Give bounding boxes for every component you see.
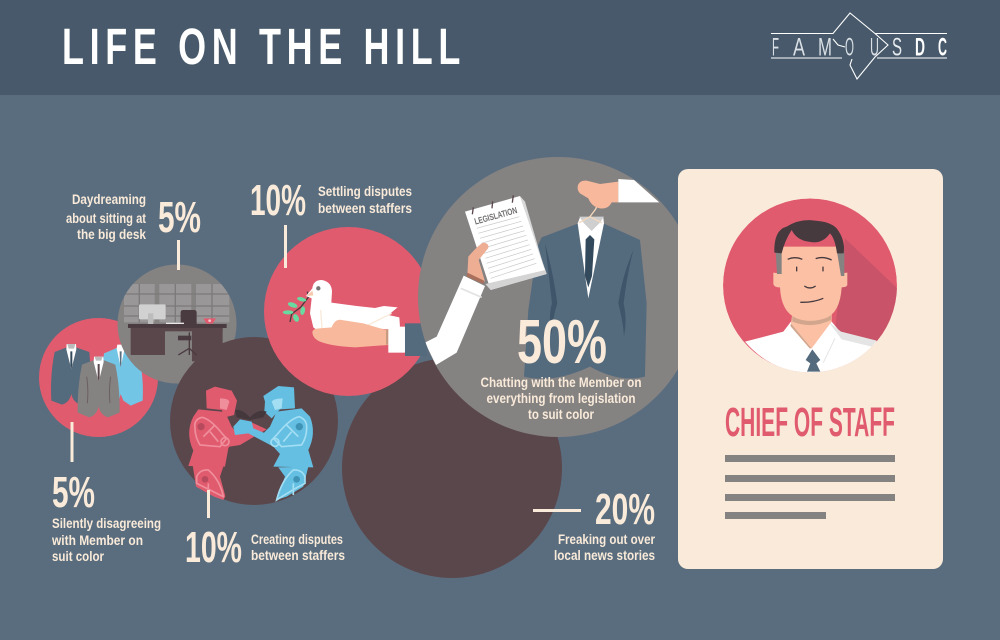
stat: 5% daydreaming: the big desk [77,226,146,242]
stat: 10% settling disputes: 10% [250,176,306,225]
stat: 20% freaking out [533,485,655,563]
connector line: robots [207,490,210,518]
stat: 50% chatting: to suit color [528,406,594,422]
stat: 50% chatting: 50% [517,308,607,377]
card text lines [725,455,895,519]
stat: 10% settling disputes [250,176,412,225]
stat: 5% disagreeing [51,468,161,564]
logo: FamousDC: O [845,34,854,62]
icon: dove [306,280,400,333]
stat: 5% daydreaming: 5% [158,193,201,242]
panel: dove circle 10% [264,227,433,396]
stat: 50% chatting: everything from legislation [486,390,636,406]
stat: 10% creating disputes [185,523,345,572]
panel: big grey circle 50% [418,157,698,437]
stat: 20% freaking out: local news stories [554,547,655,563]
panel: robots circle 10% [170,337,338,505]
logo: FamousDC: U [870,34,879,62]
icon: hand [312,320,388,347]
stat: 20% freaking out: 20% [595,485,655,534]
icon: legislation paper [465,196,547,290]
stat: 5% disagreeing: 5% [52,468,95,517]
icon: top hand [578,181,618,208]
logo: FamousDC: A [793,34,805,62]
header band [0,0,1000,95]
avatar [723,198,897,373]
stat: 50% chatting: Chatting with the Member on [480,374,642,390]
logo: FamousDC: F [772,34,779,62]
stat: 5% disagreeing: Silently disagreeing [52,515,161,531]
stat: 10% settling disputes: between staffers [318,200,412,216]
logo: FamousDC: M [818,34,832,62]
title: LIFE ON THE HILL [62,18,466,75]
stat: 10% creating disputes: between staffers [251,547,345,563]
panel: office circle 5% [118,264,236,384]
logo: FamousDC: S [892,34,902,62]
connector line: dove [284,225,287,268]
connector line: suits [70,422,74,462]
panel: big grey circle 50%: LEGISLATION [473,205,518,227]
phone [203,318,216,324]
stat: 10% creating disputes: Creating disputes [251,531,343,547]
desk [128,324,227,328]
big dark circle 20% [342,358,562,578]
icon: grey suit [78,357,120,417]
stat: 50% chatting [480,308,642,422]
stat: 20% freaking out: Freaking out over [558,531,655,547]
icon: red robot [188,387,267,500]
icon: suit on hanger [524,223,647,379]
connector line: office [177,240,180,270]
stat: 10% settling disputes: Settling disputes [318,183,412,199]
panel: suits circle 5% [39,318,158,437]
stat: 10% creating disputes: 10% [185,523,242,572]
text: C [938,34,947,62]
stat: 5% disagreeing: suit color [52,548,104,564]
logo: FamousDC: D [915,34,925,62]
icon: arm with sleeve [467,243,488,282]
icon: navy suit [51,344,91,405]
stat: 5% daydreaming [66,191,201,242]
icon: olive branch [290,292,308,322]
stat: 5% daydreaming: Daydreaming [72,191,146,207]
logo: FamousDC [771,13,947,79]
stat: 5% disagreeing: with Member on [51,532,143,548]
icon: blue suit [102,345,143,406]
stat: 5% daydreaming: about sitting at [66,210,146,226]
monitor [139,304,166,319]
icon: blue robot [233,386,313,500]
windows [124,284,229,322]
panel: chief of staff card [678,169,943,569]
chair [181,310,197,324]
